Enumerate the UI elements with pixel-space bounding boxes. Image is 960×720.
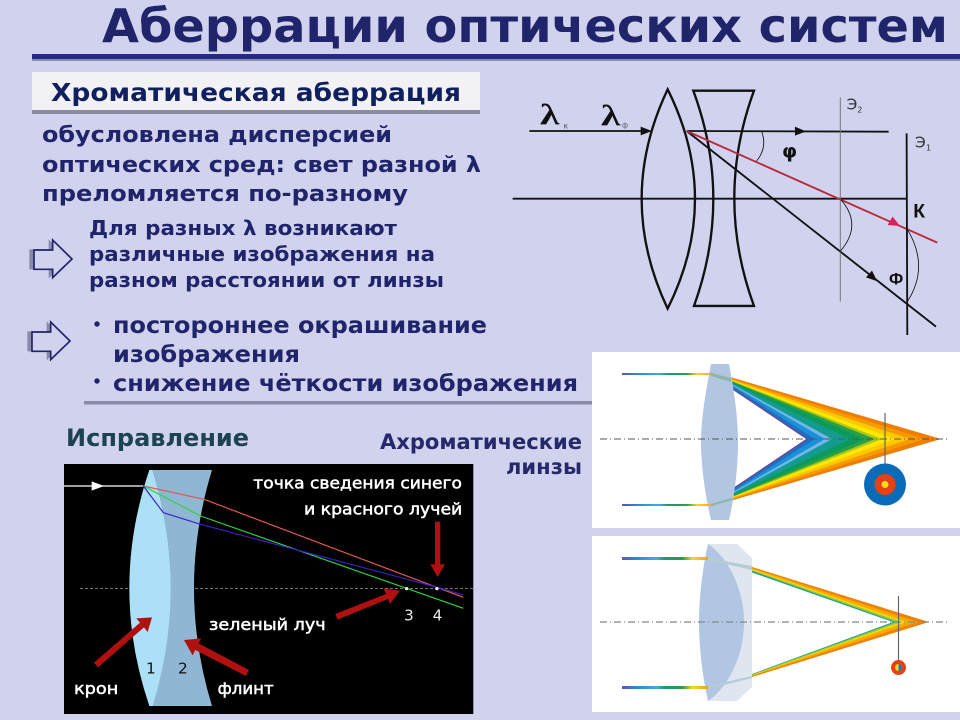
bullet list: изображения [113,340,300,368]
black background [64,464,473,714]
text block: effect [89,216,444,292]
numbers: 3 [404,607,414,625]
optical axis [80,587,473,589]
focus points [405,587,439,590]
diagram labels: ф [622,121,628,129]
panel: achromatic doublet with colored rays [64,464,473,714]
numbers: 4 [433,607,442,625]
icon: arrow 2 [27,321,70,360]
numbers [146,607,442,677]
diagram labels: Э [915,133,926,151]
panel labels: крон [74,679,118,698]
numbers: 2 [178,659,188,677]
incoming rays [622,557,708,689]
blue ray [143,486,463,595]
diagram labels: φ [782,139,797,162]
bullet list: постороннее окрашивание [113,311,487,339]
diagram: lens rays with screens [513,89,937,335]
panel: uncorrected lens dispersion [592,352,960,528]
image spot [891,596,906,675]
text block: effect: Для разных λ возникают [89,216,397,240]
text block: effect: различные изображения на [89,242,435,266]
heading: achromatic lenses: линзы [506,455,582,479]
screen E1 [904,133,910,335]
diagram labels: К [913,201,925,222]
panel labels [74,474,462,698]
red ray [143,486,463,597]
crown element [699,544,744,701]
section rule [84,401,592,404]
incoming white ray [64,481,143,491]
lens [701,364,738,520]
panel: corrected doublet dispersion [592,536,960,712]
red ray [687,131,937,243]
flint element [708,544,752,701]
panel labels: точка сведения синего [253,474,462,493]
diagram labels: 1 [926,144,931,153]
flint lens [153,470,212,706]
text block: cause: обусловлена дисперсией [42,123,392,148]
heading: chromatic aberration [32,72,480,114]
diagram labels [540,95,931,289]
title: Аберрации оптических систем [102,0,948,53]
text block: cause [42,123,481,207]
icon: arrow 1 [29,239,72,278]
green ray [143,486,463,608]
diagram labels: λ [601,99,621,132]
text block: cause: преломляется по-разному [42,182,408,207]
text block: cause: оптических сред: свет разной λ [42,153,481,178]
optical axis [513,196,906,201]
title rule [32,54,960,61]
panel labels: зеленый луч [209,615,326,634]
diagram labels: 2 [857,106,862,115]
heading: correction: Исправление [66,424,249,452]
image spot [864,413,906,506]
incoming rays [622,373,714,506]
diagram labels: к [563,122,568,131]
biconvex lens [642,89,695,309]
heading: achromatic lenses [380,430,582,479]
bullet list [94,311,578,397]
text block: effect: разном расстоянии от линзы [89,268,444,292]
violet ray [687,131,936,327]
callout arrows [94,522,445,676]
diagram labels: Э [847,95,857,113]
heading: chromatic aberration: Хроматическая аберрация [51,78,461,107]
optical axis [600,621,950,623]
biconcave lens [693,91,754,306]
bullet list: снижение чёткости изображения [113,369,578,397]
diagram labels: λ [540,98,560,131]
rays inside lens [711,373,733,506]
numbers: 1 [146,659,156,677]
diagram labels: Ф [889,270,903,289]
panel labels: и красного лучей [304,500,462,519]
heading: achromatic lenses: Ахроматические [380,430,582,454]
undeviated ray [687,127,889,136]
angle arcs [757,132,919,302]
rainbow cone [752,567,929,677]
crown lens [129,470,171,706]
rainbow cone [730,377,941,501]
optical axis [600,438,948,440]
screen E2 [839,97,842,302]
panel labels: флинт [218,679,274,698]
rays inside lens [708,558,752,689]
incoming ray [529,127,652,135]
